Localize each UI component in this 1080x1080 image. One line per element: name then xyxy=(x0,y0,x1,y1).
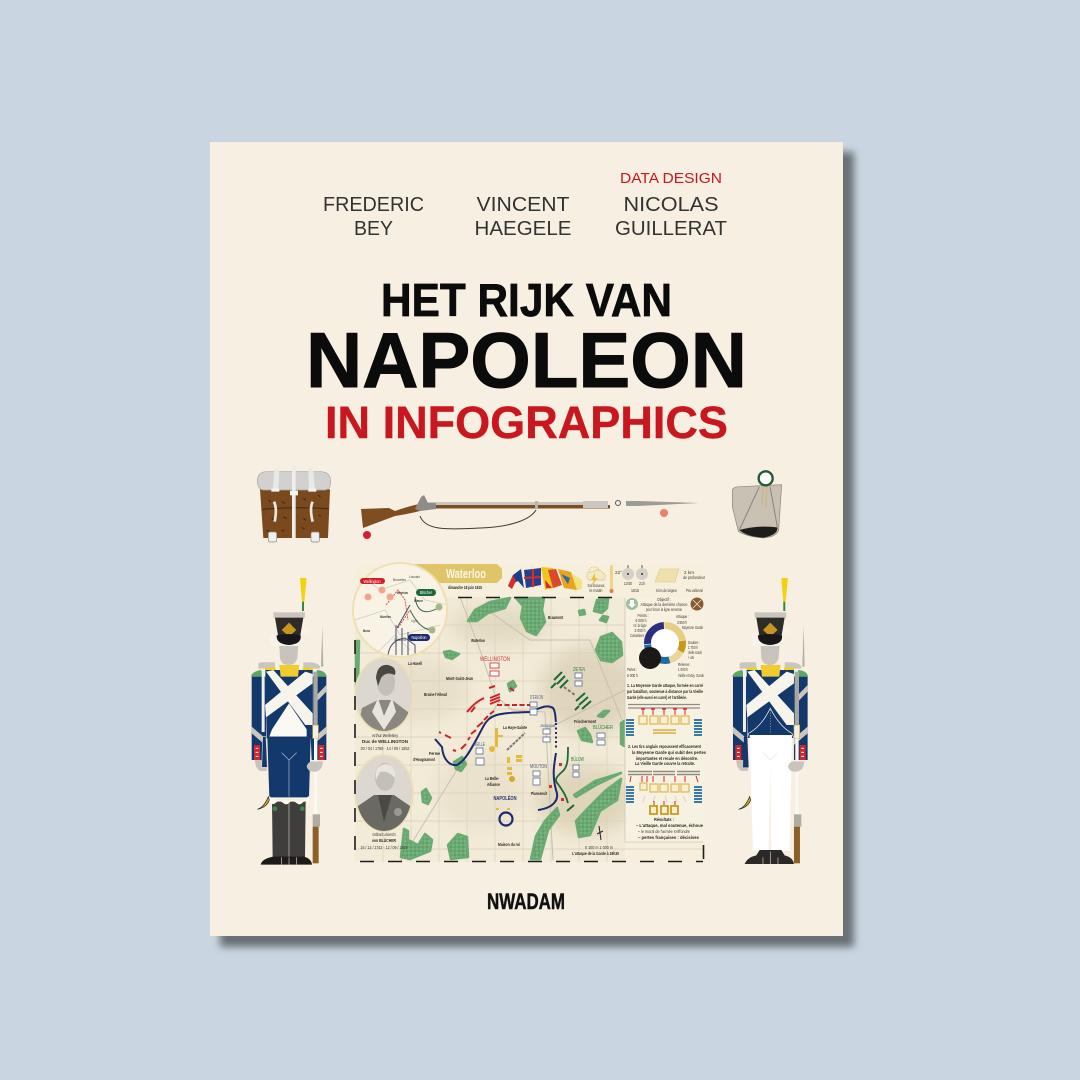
Blucher pill: Blücher xyxy=(420,590,433,595)
weather icon xyxy=(587,567,605,593)
guard coin 1 xyxy=(489,746,495,752)
title xyxy=(306,274,747,448)
inset place Nivelles: Nivelles xyxy=(380,615,391,619)
place: La Hasell: La Hasell xyxy=(408,661,422,667)
portrait: Wellington xyxy=(355,658,414,735)
inset strategic map xyxy=(353,563,448,657)
label: + arti xyxy=(688,655,694,660)
label: 1 000 h xyxy=(678,667,688,672)
guard coin 2 xyxy=(509,776,515,782)
label: Inf. de ligne xyxy=(634,623,647,628)
Gold imperial guard units xyxy=(495,728,522,810)
author: Vincent: VINCENT xyxy=(476,193,570,216)
author surname: Guillerat: GUILLERAT xyxy=(615,217,727,240)
place: Hougoumont: d'Hougoumont xyxy=(413,757,435,763)
Prussian advance line xyxy=(556,747,568,803)
place: Waterloo: Waterloo xyxy=(471,638,485,644)
stopwatches xyxy=(622,565,648,593)
unit: Mouton: MOUTON xyxy=(530,764,547,770)
depth line 2: de profondeur xyxy=(683,575,705,580)
objective text xyxy=(640,597,688,612)
scale: 0 100 m 1 000 m xyxy=(585,845,613,850)
Prussian skirmish dashes xyxy=(564,687,575,695)
result 1: – L'attaque, mal soutenue, échoue xyxy=(636,823,703,829)
time start: 11h30 xyxy=(624,581,632,586)
terrain sheet xyxy=(655,569,705,593)
label: Cuirassiers xyxy=(630,633,644,638)
British positions xyxy=(439,686,530,751)
waterloo banner xyxy=(415,564,502,583)
Blucher name: von BLÜCHER xyxy=(372,837,396,844)
thermometer xyxy=(610,565,622,593)
place: Frischermont: Frischermont xyxy=(574,719,596,725)
step 1 line 2: par bataillon, soutenue à distance par la Vieille xyxy=(627,689,703,695)
caption: Blucher xyxy=(360,832,408,850)
icon: flintlock musket xyxy=(361,495,699,539)
Wellington pill: Wellington xyxy=(364,579,381,584)
caption: Blucher: Gebhard Leberecht xyxy=(372,832,396,837)
Napoleon position ring xyxy=(500,812,512,826)
scale and north arrow xyxy=(572,826,619,857)
results text: Résultats : xyxy=(654,817,674,823)
inset place Louvain: Louvain xyxy=(409,575,420,579)
donut labels xyxy=(627,613,704,678)
place: Ohain: Braamont xyxy=(548,615,563,621)
place: Ferme d'Hougoumont: Ferme xyxy=(429,751,440,757)
Napoleon label: NAPOLÉON xyxy=(494,794,517,802)
unit: Jacquinot: Jacquinot xyxy=(540,723,556,728)
map caption: L'attaque de la Garde à 19h30 xyxy=(572,851,619,857)
author surname: Haegele: HAEGELE xyxy=(474,217,572,240)
inset place Waterloo: Waterloo xyxy=(397,591,408,595)
objective line 3: pour forcer la ligne ennemie xyxy=(646,607,682,612)
publisher logo: NWADAM xyxy=(487,889,565,914)
data design credit: DATA DESIGN xyxy=(620,170,722,187)
label: Vieille Garde xyxy=(688,650,702,655)
step 2 text: 2. Les tirs anglais repoussent efficacement xyxy=(628,744,701,750)
results text xyxy=(636,817,703,841)
place: La Haye-Sainte: La Haye-Sainte xyxy=(503,725,527,731)
Blucher dates: 16 / 12 / 1742 - 12 / 09 / 1819 xyxy=(360,845,408,850)
step 1 text: 1. La Moyenne Garde attaque, formée en carré xyxy=(627,683,703,689)
author: Frederic Bey: FREDERIC xyxy=(323,193,424,216)
step 2 line 3: importantes et recule en désordre. xyxy=(636,756,698,762)
inset place Ligny: Ligny xyxy=(411,619,418,623)
border ticks xyxy=(355,598,704,862)
author: Nicolas: NICOLAS xyxy=(624,193,718,216)
red marker dot xyxy=(363,531,371,539)
weather caption line 2: le matin xyxy=(590,588,603,593)
Wellington unit marks xyxy=(490,663,499,676)
place: La Belle-Alliance: La Belle- xyxy=(485,776,499,782)
unit: Zieten: ZIETEN xyxy=(573,667,585,673)
French artillery markers xyxy=(549,763,564,801)
unit: Reille: REILLE xyxy=(474,742,485,748)
map spread: Waterloo xyxy=(353,563,706,862)
label: 6 000 h xyxy=(636,618,647,623)
muskets icon xyxy=(690,598,704,610)
temperature: 22° xyxy=(615,570,622,575)
unit: Bulow: BÜLOW xyxy=(571,756,584,763)
place: Mont-Saint-Jean: Mont-Saint-Jean xyxy=(446,676,473,682)
bayonet xyxy=(626,501,699,506)
label: 3 850 h xyxy=(677,620,687,625)
step 1 line 3: Garde (elle aussi en carré) et l'artillerie. xyxy=(627,695,687,701)
time label: 1815 xyxy=(631,588,639,593)
artillery column xyxy=(507,733,525,750)
place: Braine-l'Alleud: Braine-l'Alleud xyxy=(424,692,447,698)
label: Réserve : xyxy=(678,662,691,667)
author surname: Bey: BEY xyxy=(354,217,393,240)
forests xyxy=(356,598,624,859)
panel: book cover xyxy=(210,142,843,936)
depth: 2 km xyxy=(684,570,694,575)
inset place Bruxelles: Bruxelles xyxy=(393,578,406,582)
date line: dimanche 18 juin 1815 xyxy=(448,585,482,591)
donut labels: Feints : xyxy=(638,613,648,618)
portrait: Blucher xyxy=(355,755,414,832)
Prussian columns xyxy=(551,672,591,811)
weather caption: Sol boueux xyxy=(588,583,605,588)
diagram 2 xyxy=(626,772,702,814)
Napoleon pill: Napoléon xyxy=(412,635,427,640)
French line of attack xyxy=(435,706,556,765)
inset place Charleroi: Charleroi xyxy=(394,638,406,642)
French second line xyxy=(538,753,557,810)
result 3: – pertes françaises : décisives xyxy=(638,835,699,841)
result 2: – le moral de l'armée s'effondre xyxy=(638,829,690,834)
width: 5 km de largeur xyxy=(656,588,677,593)
Wellington dates: 30 / 04 / 1769 - 14 / 09 / 1852 xyxy=(360,746,410,751)
unit: Durutte: D'ERLON xyxy=(530,695,543,701)
diagram 1 xyxy=(626,704,702,735)
Wellington name: Duc de WELLINGTON xyxy=(362,739,408,745)
objective text: Objectif : xyxy=(657,597,671,602)
icon: pouch xyxy=(732,471,782,538)
map terrain xyxy=(355,597,703,862)
place: Plancenoit: Plancenoit xyxy=(531,791,547,797)
objective line 2: Attaque de la dernière chance xyxy=(640,602,688,607)
label: Soutien : xyxy=(688,640,700,645)
relief: Peu vallonné xyxy=(686,588,703,593)
label: Pertes : xyxy=(627,667,637,672)
label: Attaque : xyxy=(676,614,689,619)
inset place Wavre: Wavre xyxy=(414,599,423,603)
title line 1: HET RIJK VAN xyxy=(381,274,672,326)
place: Maison du roi: Maison du roi xyxy=(498,842,520,848)
authors block xyxy=(323,170,727,240)
label: Vieille et Moy. Garde xyxy=(678,673,704,678)
panel border xyxy=(625,598,703,842)
step 2 line 2: la Moyenne Garde qui subit des pertes xyxy=(632,750,706,756)
label: 1 750 h xyxy=(688,645,698,650)
soldier: blue trousers xyxy=(251,578,327,865)
step 2 line 4: La Vieille Garde couvre la retraite. xyxy=(635,761,695,767)
caption: Wellington: Arthur Wellesley xyxy=(372,733,399,738)
map place names xyxy=(408,615,613,848)
flags row xyxy=(508,567,582,590)
panel: battle analysis column xyxy=(625,597,706,842)
icon: knapsack xyxy=(257,466,331,542)
cover drop shadow xyxy=(220,152,854,947)
time end: 21h xyxy=(639,581,645,586)
map paper xyxy=(355,565,705,862)
label: Moyenne Garde xyxy=(682,625,703,630)
French dotted advance xyxy=(555,723,557,750)
losses circle xyxy=(639,647,661,669)
unit: Blucher: BLÜCHER xyxy=(593,724,613,731)
place: Alliance: Alliance xyxy=(487,782,500,788)
step 2 text xyxy=(628,744,706,767)
caption: Wellington xyxy=(360,733,410,751)
salmon marker dot xyxy=(660,509,668,517)
donut chart: forces xyxy=(639,626,682,669)
title line 3: IN INFOGRAPHICS xyxy=(325,397,728,448)
label: 5 000 h xyxy=(627,673,638,678)
inset place Mons: Mons xyxy=(363,629,370,633)
banner title: Waterloo xyxy=(446,567,486,581)
objective icon xyxy=(626,598,638,610)
label: 3 000 h xyxy=(634,628,646,633)
French unit markers xyxy=(476,673,605,785)
title line 2: NAPOLEON xyxy=(306,316,747,404)
Wellington unit label: WELLINGTON xyxy=(480,657,510,663)
soldier: white trousers xyxy=(732,578,808,864)
step 1 text xyxy=(627,683,703,701)
